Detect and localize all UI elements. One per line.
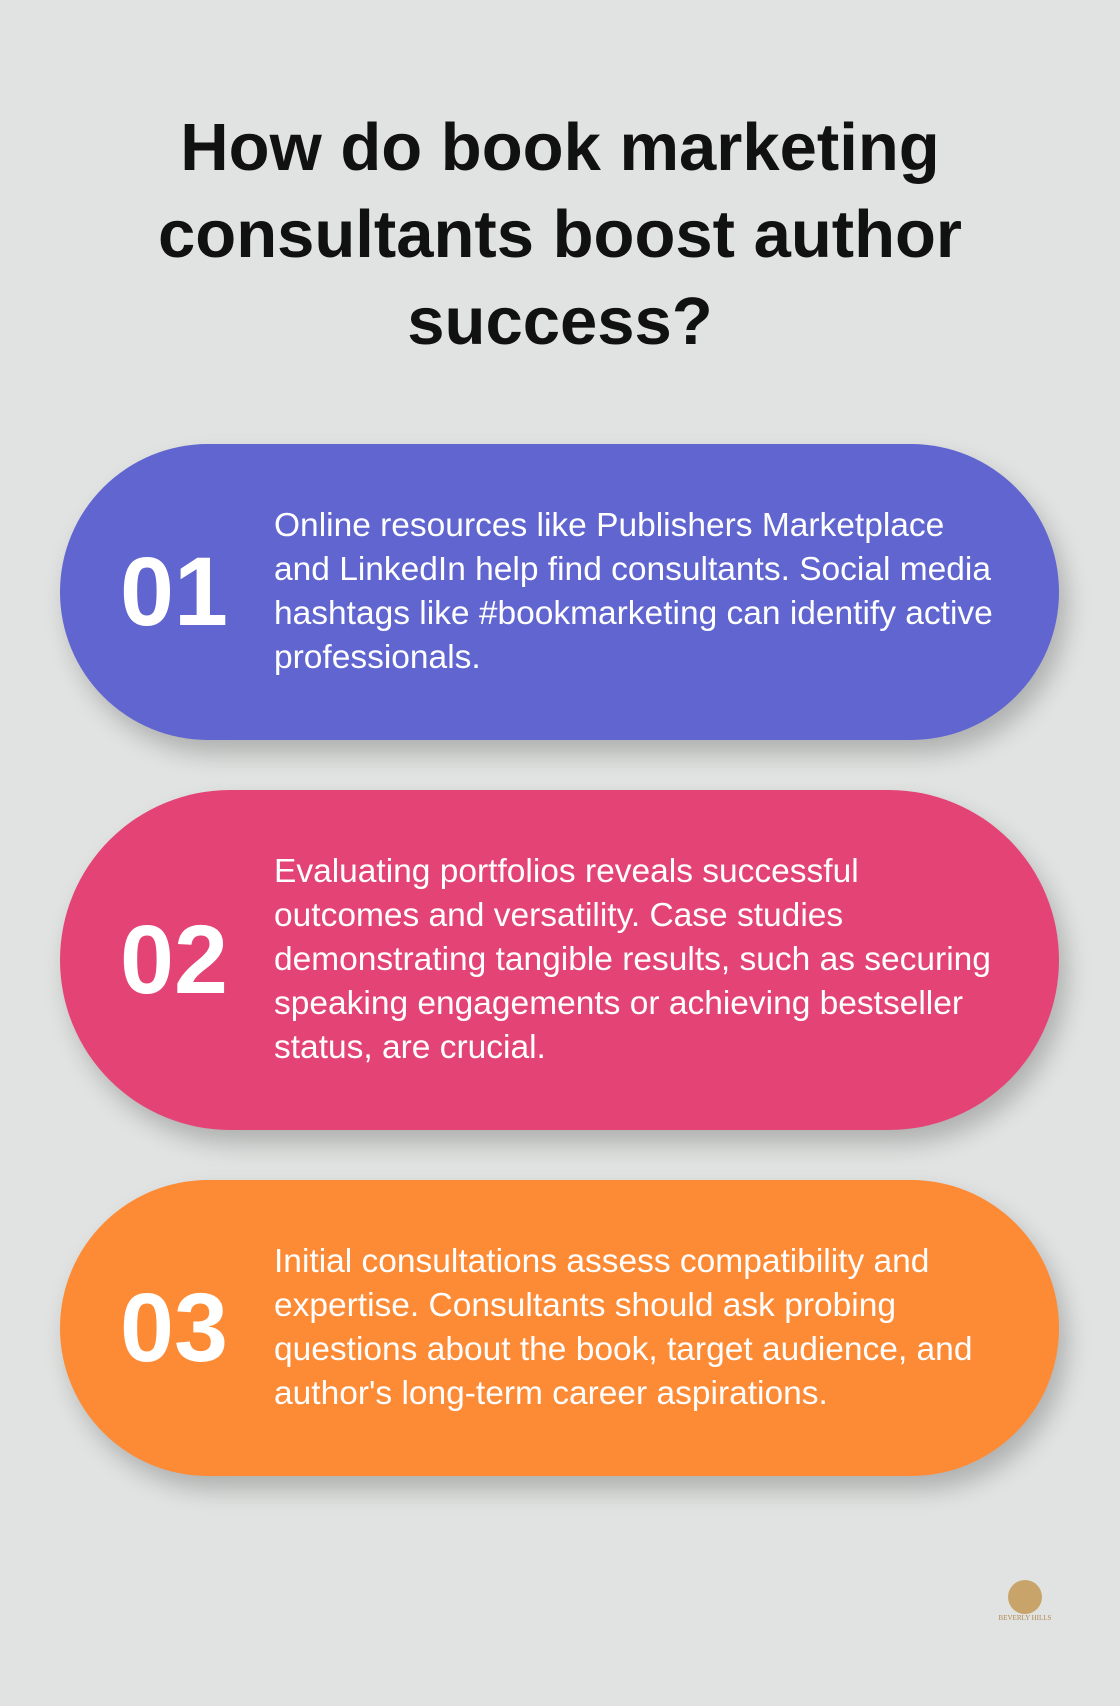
panel: step 01: [60, 444, 1059, 740]
text 01: and LinkedIn help find consultants. Social media: [274, 551, 991, 588]
logo: BEVERLY HILLS: [999, 1614, 1051, 1622]
title: success?: [407, 284, 713, 359]
title: [158, 110, 962, 359]
text 02: status, are crucial.: [274, 1029, 546, 1066]
logo: [998, 1580, 1051, 1622]
text 01: Online resources like Publishers Marketplace: [274, 507, 944, 544]
number 03: 03: [120, 1273, 228, 1382]
text 02: outcomes and versatility. Case studies: [274, 897, 843, 934]
text 01: [274, 507, 993, 676]
text 02: [274, 853, 991, 1066]
text 03: Initial consultations assess compatibility and: [274, 1243, 929, 1280]
title: How do book marketing: [180, 110, 940, 185]
text 02: Evaluating portfolios reveals successful: [274, 853, 859, 890]
panel: step 02: [60, 790, 1059, 1130]
text 03: author's long-term career aspirations.: [274, 1375, 828, 1412]
text 03: [274, 1243, 972, 1412]
title: consultants boost author: [158, 197, 962, 272]
panel: step 03: [60, 1180, 1059, 1476]
text 03: questions about the book, target audience, and: [274, 1331, 972, 1368]
text 02: demonstrating tangible results, such as securing: [274, 941, 991, 978]
text 01: hashtags like #bookmarketing can identify active: [274, 595, 993, 632]
text 01: professionals.: [274, 639, 481, 676]
number 02: 02: [120, 905, 228, 1014]
text 03: expertise. Consultants should ask probing: [274, 1287, 896, 1324]
number 01: 01: [120, 537, 228, 646]
text 02: speaking engagements or achieving bestseller: [274, 985, 963, 1022]
